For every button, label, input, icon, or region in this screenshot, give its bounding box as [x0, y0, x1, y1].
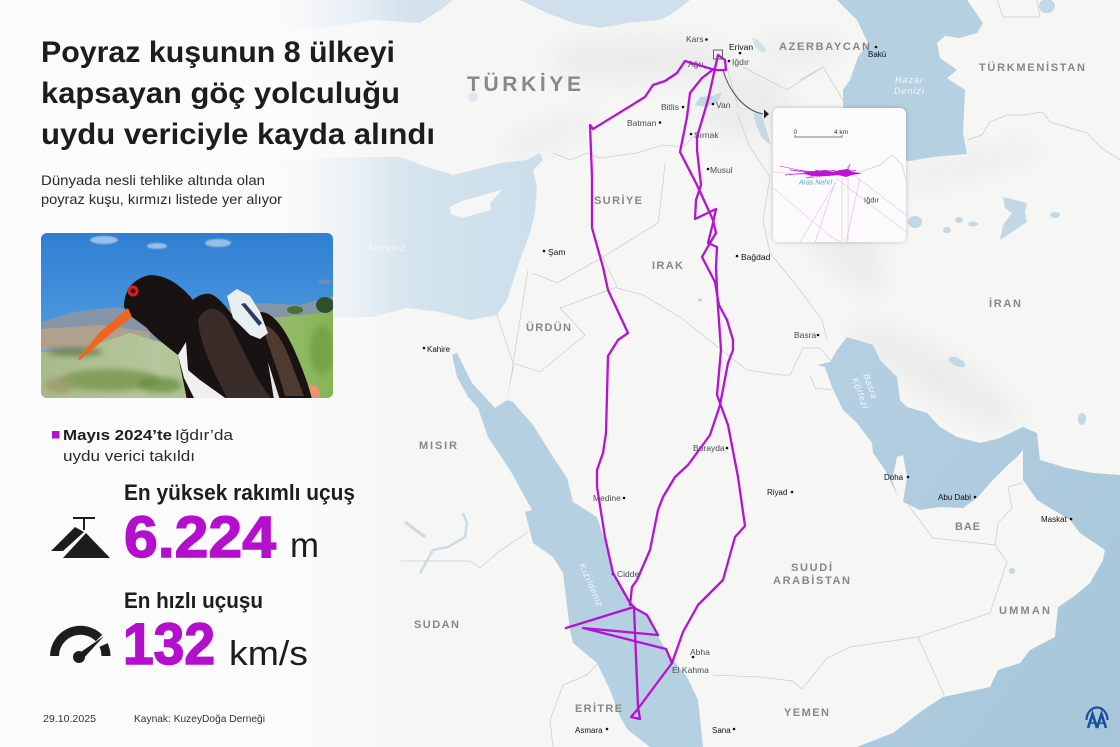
map labels: seas: Denizi — [894, 86, 925, 96]
map labels: seas — [366, 75, 925, 608]
map labels: seas: Kızıldeniz — [577, 562, 605, 608]
map labels: cities: Şam — [548, 247, 565, 257]
map labels: countries: SURİYE — [594, 194, 642, 207]
sea: Red Sea — [452, 353, 703, 747]
map labels: cities: Şırnak — [694, 130, 719, 140]
map labels: countries: ERİTRE — [575, 702, 622, 715]
map labels: cities: Riyad — [767, 488, 787, 497]
map labels: seas: Akdeniz — [366, 243, 406, 253]
map labels: cities: Abu Dabi — [938, 493, 971, 502]
photo tag — [227, 289, 268, 339]
sea: Mediterranean — [230, 153, 543, 322]
subtitle: Dünyada nesli tehlike altında olan — [41, 172, 265, 188]
inset scale bar: 4 km — [834, 129, 848, 136]
title — [41, 36, 435, 151]
stat: highest altitude — [124, 480, 355, 570]
map labels: cities: Maskat — [1041, 515, 1068, 524]
map labels: countries: IRAK — [652, 260, 683, 272]
inset scale bar: 0 — [794, 129, 798, 136]
photo: oystercatcher with satellite tag — [41, 233, 334, 402]
map labels: cities: Asmara — [575, 726, 603, 735]
lakes — [405, 0, 1086, 574]
stat: highest altitude: m — [290, 526, 319, 565]
map labels: cities: Ağrı — [688, 59, 704, 69]
map labels: seas: Körfezi — [850, 376, 871, 411]
map labels: countries: İRAN — [989, 297, 1021, 310]
map labels: cities: Medine — [593, 493, 621, 503]
map labels: cities: Cidde — [617, 569, 639, 579]
stat: fastest flight — [123, 588, 308, 677]
map labels: countries: SUUDİ — [791, 561, 832, 574]
inset map: Iğdır — [864, 198, 880, 204]
note: satellite tag date: Iğdır’da — [175, 427, 234, 444]
map labels: cities: Batman — [627, 118, 657, 128]
map labels: countries: ÜRDÜN — [526, 321, 571, 334]
map labels: seas: Hazar — [895, 75, 924, 85]
stat: highest altitude: 6.224 — [124, 505, 276, 570]
photo hands — [182, 394, 186, 398]
source: Kaynak: KuzeyDoğa Derneği — [134, 713, 265, 725]
map labels: countries: TÜRKİYE — [467, 73, 581, 96]
icon: speedometer — [54, 630, 106, 663]
map labels: cities: Musul — [710, 165, 733, 175]
inset map — [773, 108, 906, 242]
stat: fastest flight: km/s — [229, 635, 308, 673]
map labels: countries: ARABİSTAN — [773, 574, 850, 587]
inset scale bar — [794, 129, 848, 137]
map labels: cities: Kars — [686, 34, 703, 44]
note: satellite tag date — [52, 427, 234, 465]
map labels: cities: Doha — [884, 473, 904, 482]
migration route — [566, 55, 745, 719]
photo eye — [128, 286, 138, 296]
subtitle: poyraz kuşu, kırmızı listede yer alıyor — [41, 191, 282, 207]
map labels: seas: Basra — [861, 372, 879, 400]
sea: Black Sea — [250, 0, 453, 30]
map labels: countries: AZERBAYCAN — [779, 41, 870, 53]
note: satellite tag date: uydu verici takıldı — [63, 448, 195, 465]
sea: Persian Gulf and Arabian Sea — [817, 337, 1120, 747]
map labels: cities: Bitlis — [661, 102, 679, 112]
title: uydu vericiyle kayda alındı — [41, 118, 435, 151]
map labels: cities: Kahire — [427, 345, 451, 354]
map labels: cities: Basra — [794, 330, 816, 340]
map labels: cities: El Kahma — [672, 665, 709, 675]
photo beak — [78, 308, 132, 360]
map labels: countries: TÜRKMENİSTAN — [979, 61, 1085, 74]
note: satellite tag date: Mayıs 2024’te — [63, 427, 172, 444]
map labels: countries — [414, 41, 1085, 719]
photo bird body — [124, 275, 312, 400]
map labels: cities: Bağdad — [741, 252, 771, 262]
icon: mountain — [51, 517, 110, 558]
map labels: cities: Van — [716, 100, 731, 110]
title: kapsayan göç yolculuğu — [41, 77, 400, 110]
terrain shading — [500, 36, 1040, 442]
map labels: countries: UMMAN — [999, 605, 1050, 617]
left fade panel — [0, 0, 410, 747]
inset labels: Aras Nehri — [798, 180, 832, 186]
map labels: cities: Bakü — [868, 50, 886, 59]
map labels: cities: Sana — [712, 726, 731, 735]
date: 29.10.2025 — [43, 713, 96, 725]
map labels: cities: Erivan — [729, 42, 753, 52]
map labels: countries: YEMEN — [784, 707, 829, 719]
map labels: cities: Burayda — [693, 443, 725, 453]
map labels: cities — [423, 34, 1072, 735]
title: Poyraz kuşunun 8 ülkeyi — [41, 36, 395, 69]
stat: fastest flight: En hızlı uçuşu — [124, 588, 263, 613]
map labels: cities: Abha — [690, 647, 710, 657]
stat: highest altitude: En yüksek rakımlı uçuş — [124, 480, 355, 505]
map labels: countries: BAE — [955, 521, 980, 533]
borders — [400, 0, 1120, 747]
start square marker — [714, 50, 722, 59]
subtitle — [41, 172, 282, 207]
stat: fastest flight: 132 — [123, 612, 215, 677]
icon: AA logo — [1086, 708, 1108, 728]
sea: Caspian — [837, 0, 983, 161]
map labels: countries: MISIR — [419, 440, 457, 452]
map labels: countries: SUDAN — [414, 619, 459, 631]
arrow to inset — [723, 70, 769, 118]
map labels: cities: Iğdır — [732, 57, 749, 67]
inset trails — [773, 172, 906, 242]
